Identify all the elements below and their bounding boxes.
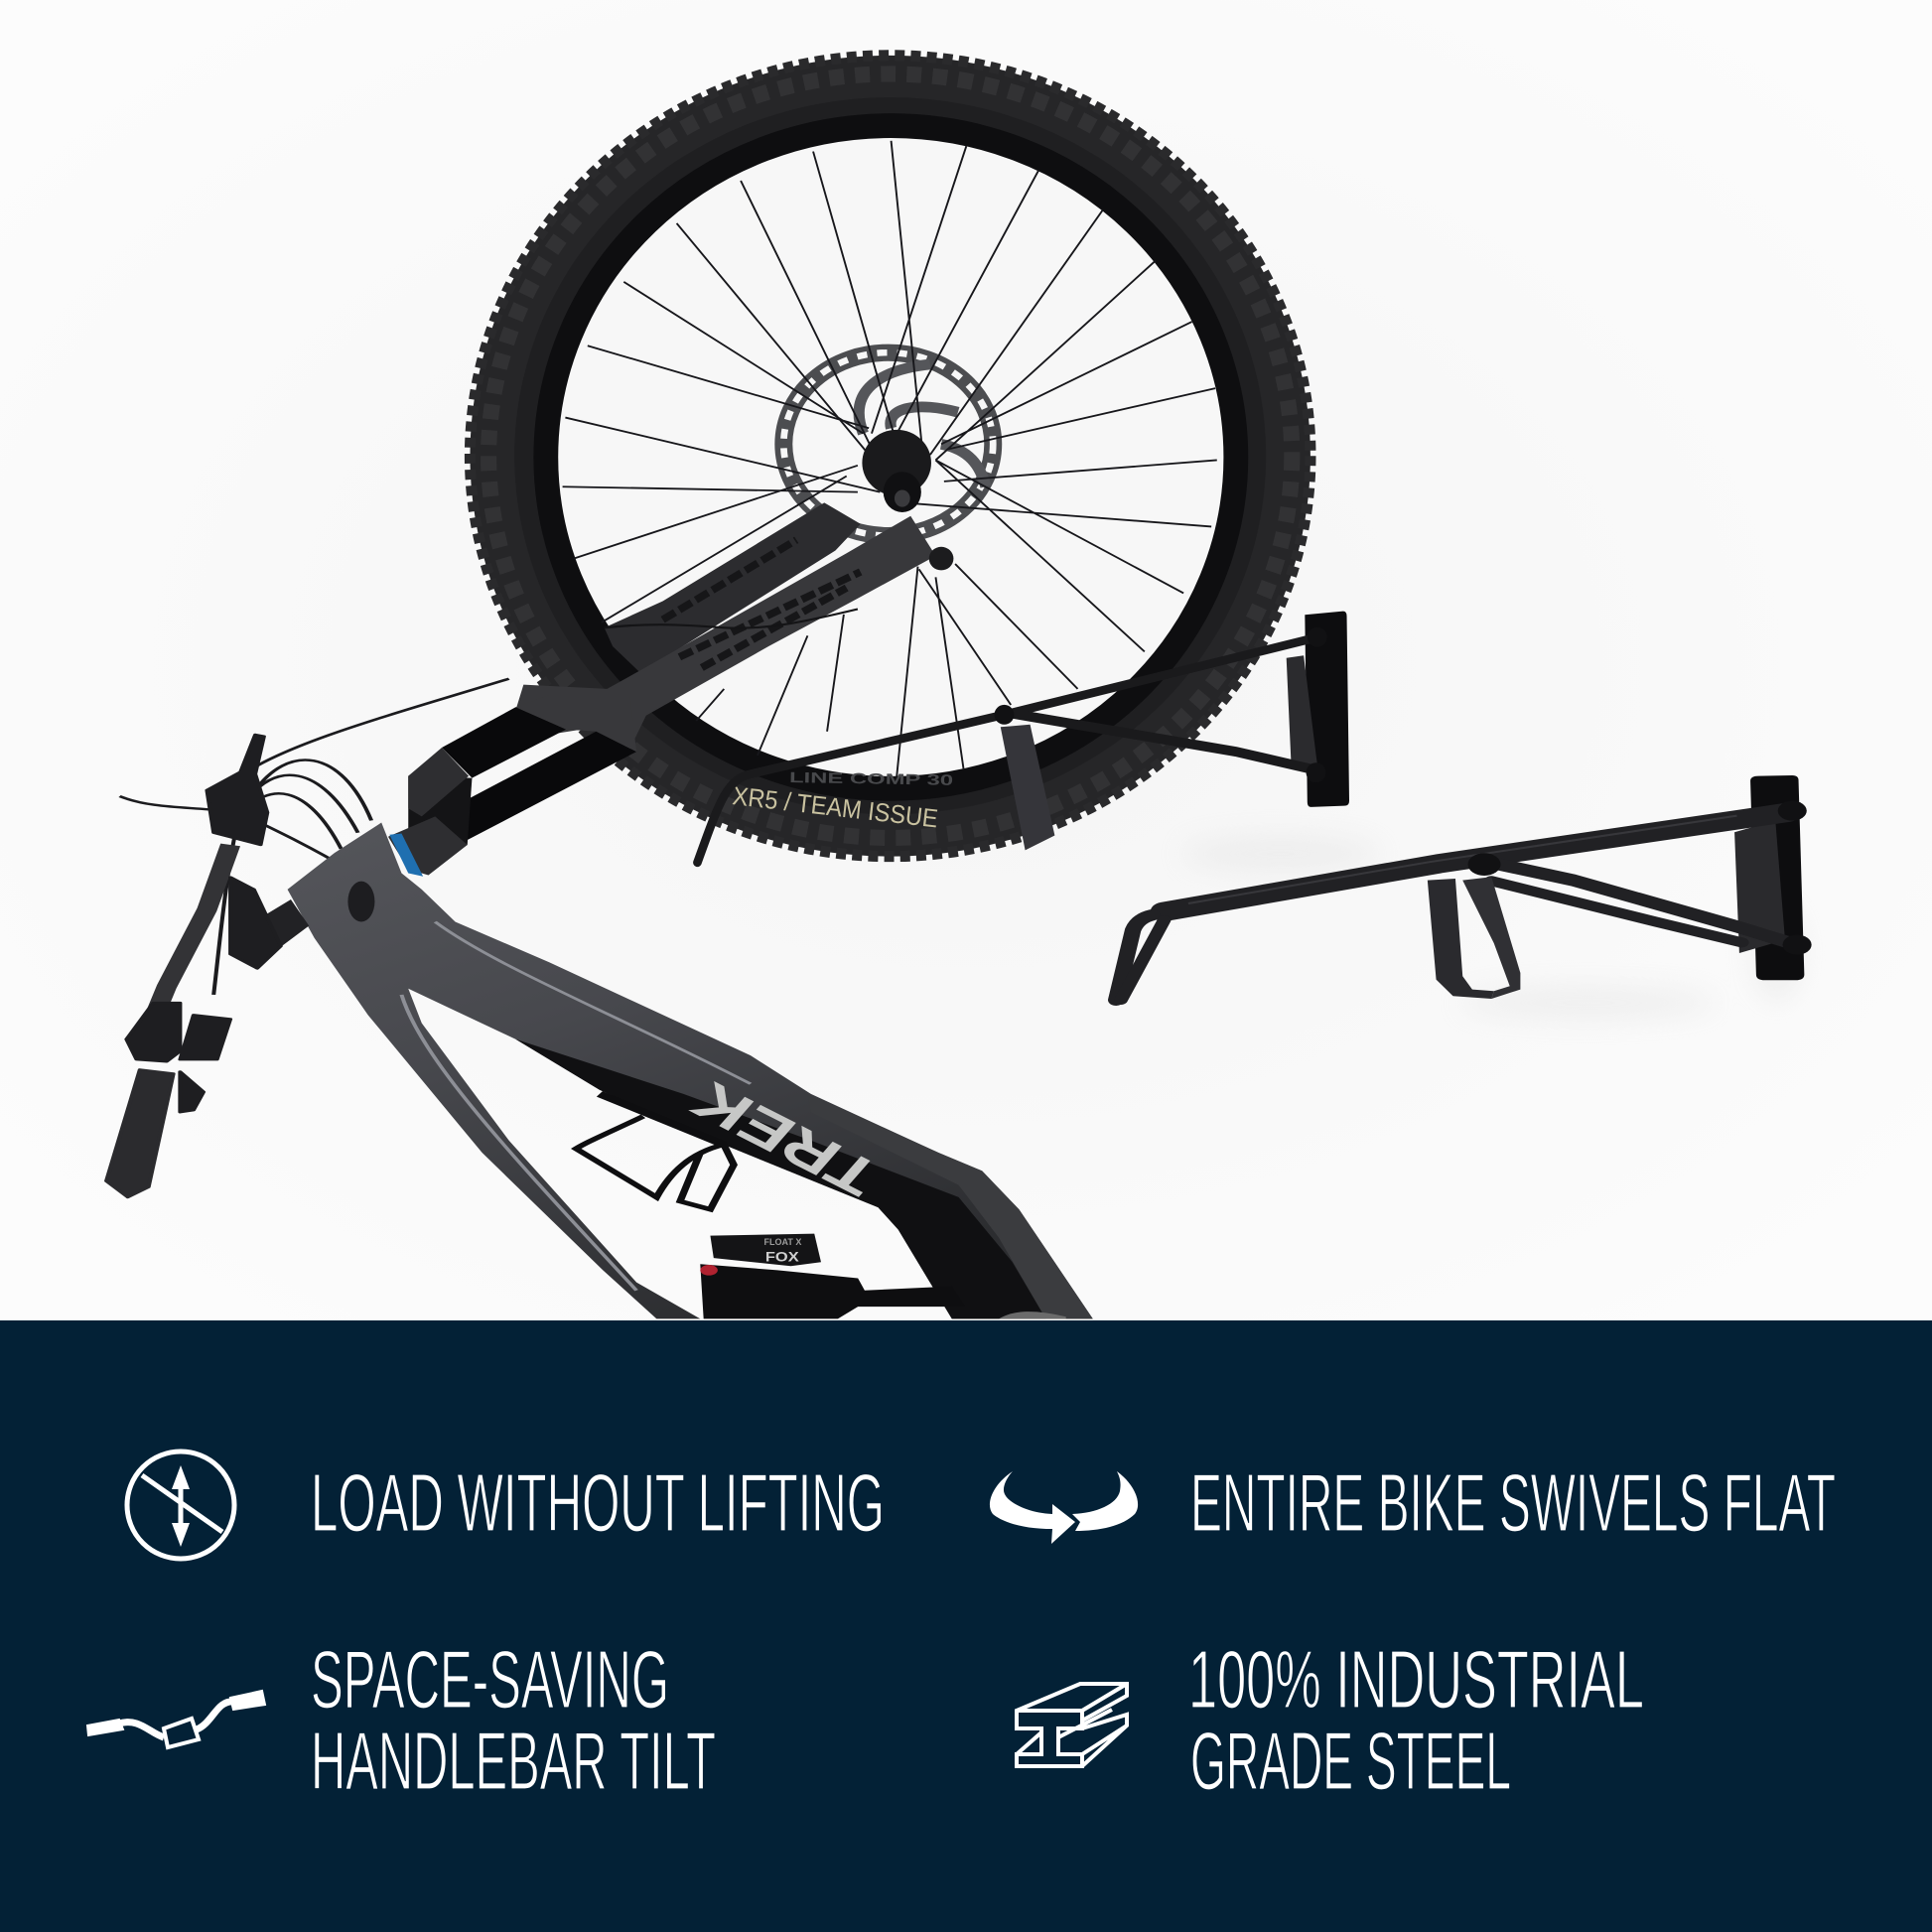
brake rotor (783, 352, 993, 536)
text: load without lifting: LOAD WITHOUT LIFTING (311, 1456, 885, 1549)
bracket (1287, 655, 1318, 773)
icon: steel I-beam (1017, 1684, 1127, 1766)
fork stanchions and crown (388, 695, 636, 877)
bike frame and cockpit (106, 679, 1093, 1318)
tire (470, 56, 1311, 857)
icon: no lifting (127, 1451, 234, 1559)
text: space-saving handlebar tilt (311, 1633, 716, 1807)
frame (288, 823, 1093, 1318)
front wheel (470, 56, 1311, 857)
rack arms and hook (1116, 812, 1800, 1000)
hub and axle (862, 430, 931, 512)
grip (106, 1069, 174, 1197)
wall shadows (1181, 836, 1802, 1019)
strap (1428, 879, 1494, 999)
bolts (995, 627, 1327, 782)
rim lettering: LINE COMP 30 (789, 769, 953, 789)
tire sidewall lettering: XR5 / TEAM ISSUE (731, 780, 939, 834)
frame black underside (515, 1039, 1045, 1318)
frame highlights (401, 921, 751, 1291)
spokes, rotor and hub (510, 141, 1217, 776)
bottom navy feature panel (0, 1320, 1932, 1932)
TREK logo: TREK (682, 1065, 887, 1211)
upper arm highlight (1188, 816, 1736, 903)
stem (261, 899, 309, 947)
frame rear cover (807, 1094, 1093, 1318)
text: industrial grade steel: GRADE STEEL (1190, 1715, 1511, 1807)
handlebar (143, 845, 230, 1043)
bottle cage (576, 1094, 734, 1209)
white wall background (0, 0, 1932, 1322)
rim (546, 126, 1236, 788)
wall plate (1750, 775, 1804, 980)
rear shock: FOX (765, 1250, 799, 1265)
brake lever assembly (126, 735, 281, 1112)
text: space-saving handlebar tilt: HANDLEBAR TILT (311, 1715, 716, 1807)
icon: swivel arrows (990, 1471, 1138, 1544)
rack arms and hook (697, 637, 1318, 863)
empty folded rack (1116, 775, 1812, 1000)
rack holding the bike (697, 612, 1349, 863)
bracket (1734, 821, 1785, 953)
text: industrial grade steel (1188, 1633, 1644, 1807)
cables (120, 679, 509, 995)
product photo: bike on wall rack (0, 0, 1932, 1322)
bolts (1468, 801, 1812, 955)
wall plate (1305, 612, 1349, 807)
rear shock (700, 1234, 1066, 1318)
fork lower legs (510, 502, 953, 751)
head tube port (347, 882, 374, 921)
spokes (563, 141, 1217, 776)
text: space-saving handlebar tilt: SPACE-SAVING (311, 1633, 669, 1725)
text: industrial grade steel: 100% INDUSTRIAL (1188, 1633, 1644, 1725)
rear shock: FLOAT X (764, 1237, 802, 1247)
wheel strap (1001, 725, 1054, 850)
icon: tilted handlebar (87, 1691, 265, 1747)
